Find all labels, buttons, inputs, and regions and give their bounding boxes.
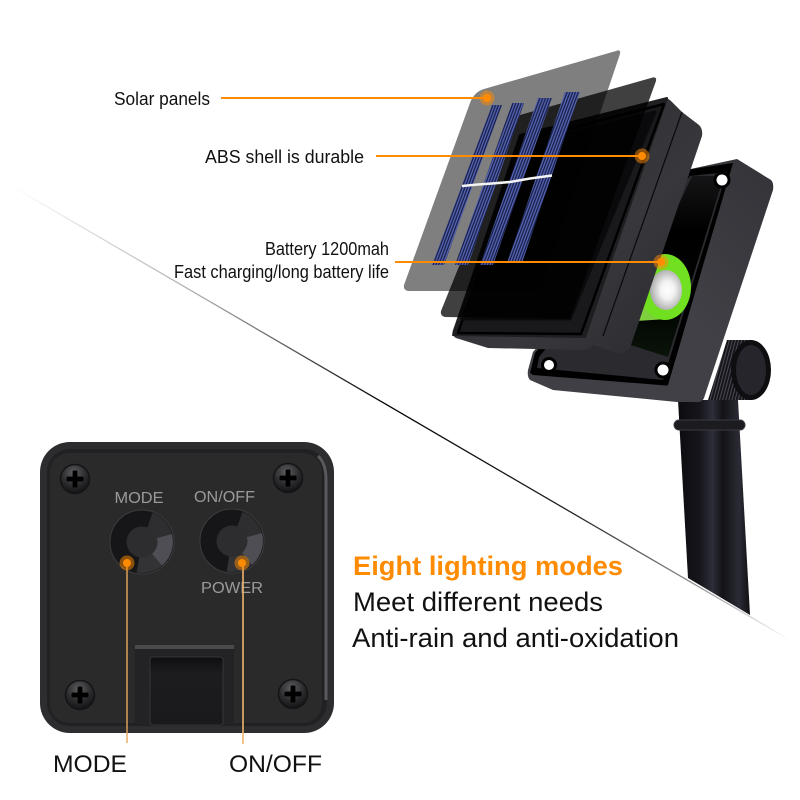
exploded product view: [404, 50, 773, 615]
feature text block: [352, 551, 679, 653]
screws: [60, 464, 308, 710]
screw holes: [541, 172, 730, 378]
callout: battery: [174, 238, 668, 282]
mode button: MODE: [114, 490, 164, 507]
device body: [40, 442, 334, 733]
callout: solar panels: Solar panels: [114, 88, 210, 109]
callout: mode: MODE: [53, 751, 127, 778]
rear housing: [528, 159, 773, 402]
feature text block: Meet different needs: [353, 587, 603, 617]
diagonal divider line: [10, 185, 790, 640]
callout: solar panels: [114, 88, 494, 109]
battery: [630, 254, 691, 321]
callout: on/off: [229, 556, 322, 778]
feature text block: Anti-rain and anti-oxidation: [352, 623, 679, 653]
callout: on/off: ON/OFF: [229, 751, 322, 778]
on/off button: ON/OFF: [194, 489, 255, 506]
on/off button: POWER: [201, 580, 263, 597]
callout: battery: Battery 1200mah: [265, 238, 389, 259]
callout: battery: Fast charging/long battery life: [174, 261, 389, 282]
swivel joint: [708, 340, 771, 400]
charging port: [135, 645, 234, 725]
solar cells: [432, 92, 580, 265]
callout: ABS shell: [205, 146, 650, 167]
grey panel layer: [404, 50, 620, 291]
dark panel layer: [441, 77, 656, 319]
on/off button: [194, 489, 264, 597]
feature text block: Eight lighting modes: [353, 551, 623, 581]
mode button: [110, 490, 174, 574]
callout: mode: [53, 556, 134, 778]
callout: ABS shell: ABS shell is durable: [205, 146, 364, 167]
ABS shell frame: [452, 98, 702, 353]
control panel device: [40, 442, 334, 733]
ground stake: [674, 400, 750, 615]
